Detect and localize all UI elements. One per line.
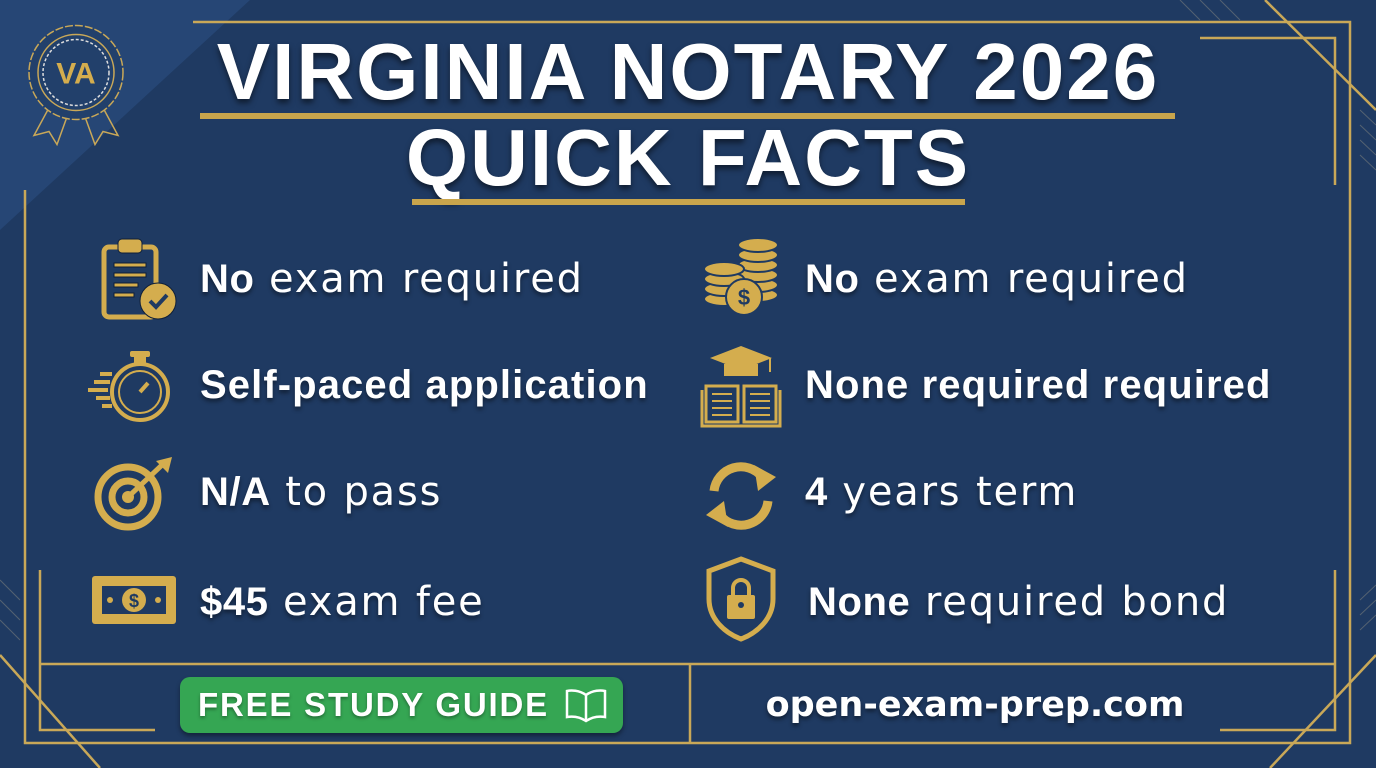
badge: VA seal: [28, 24, 124, 146]
title: VIRGINIA NOTARY 2026: [217, 27, 1159, 116]
text: row4 right: None required bond: [808, 579, 1229, 625]
title: QUICK FACTS: [406, 113, 970, 202]
text: row2 left: Self-paced application: [200, 363, 649, 407]
icon: stopwatch: [88, 351, 170, 422]
text: website: open-exam-prep.com: [766, 685, 1184, 725]
icon: refresh arrows: [706, 462, 776, 530]
icon: open book: [566, 689, 606, 722]
text: row1 left: No exam required: [200, 256, 584, 302]
text: row3 left: N/A to pass: [200, 469, 442, 515]
button: free study guide: [180, 677, 623, 733]
icon: coins: $: [738, 285, 750, 310]
icon: money bill: $: [129, 591, 139, 611]
icon: shield lock: [706, 556, 776, 642]
button: free study guide: FREE STUDY GUIDE: [198, 686, 549, 723]
text: row4 left: $45 exam fee: [200, 579, 485, 625]
text: row3 right: 4 years term: [805, 469, 1078, 515]
icon: book with cap: [700, 346, 782, 428]
text: row1 right: No exam required: [805, 256, 1189, 302]
badge: VA seal: VA: [56, 58, 96, 90]
icon: money bill: [92, 576, 176, 624]
title: [200, 27, 1175, 207]
icon: clipboard: [102, 238, 176, 320]
text: row2 right: None required required: [805, 363, 1272, 407]
icon: coins: [705, 239, 777, 314]
icon: target: [94, 457, 172, 530]
